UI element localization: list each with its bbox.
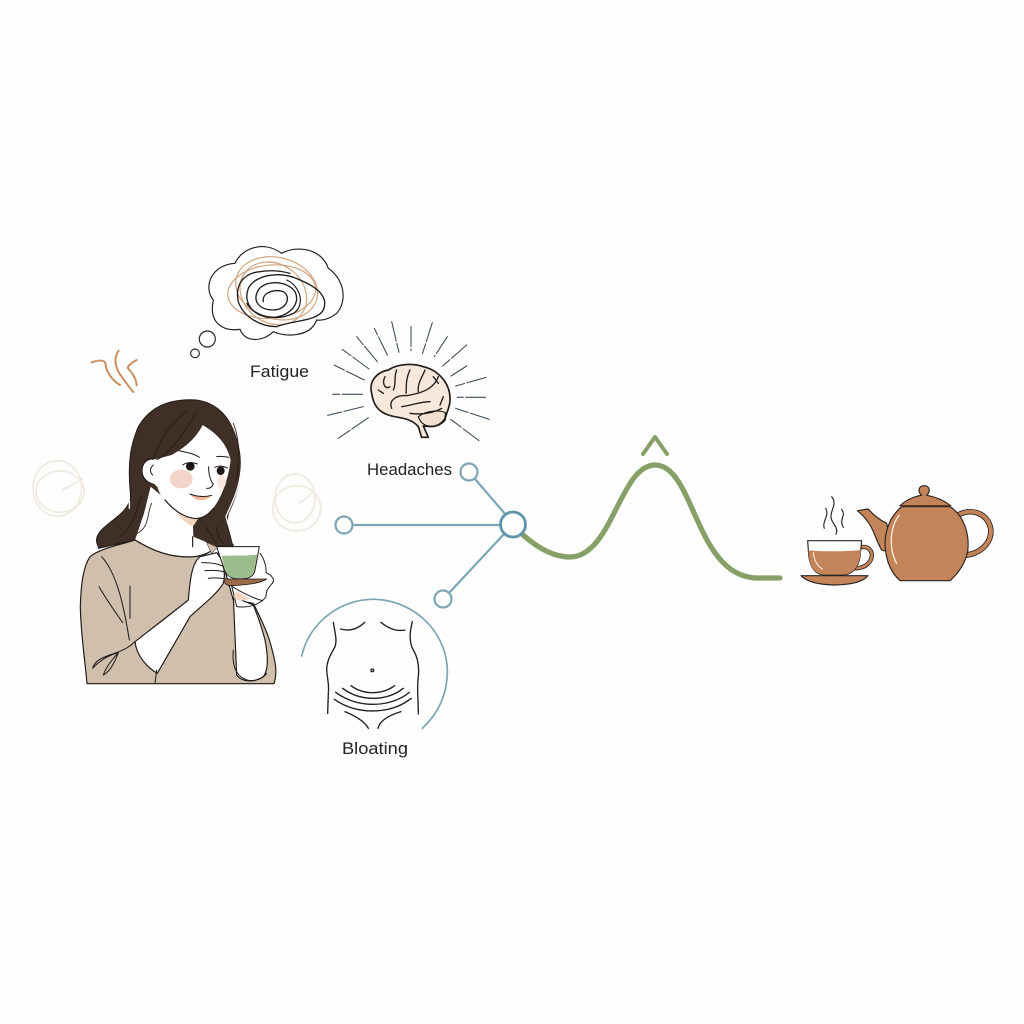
icon: thought bubble with scribble <box>191 247 343 358</box>
neck shadow <box>177 513 198 526</box>
icon: left faint swirl <box>33 461 84 516</box>
cup <box>217 547 259 579</box>
icon: stress marks above head <box>92 351 137 392</box>
hand details <box>202 553 273 607</box>
label: Fatigue: Fatigue <box>250 362 309 381</box>
steam <box>824 497 843 534</box>
saucer <box>224 579 267 586</box>
brain body <box>371 364 450 437</box>
saucer <box>801 576 868 585</box>
icon: right faint swirl <box>273 474 321 531</box>
dark scribble <box>238 271 325 327</box>
neck <box>135 487 217 557</box>
tan scribble <box>226 248 325 337</box>
cerebellum <box>418 411 445 426</box>
eyes <box>186 462 195 471</box>
arc <box>302 599 447 728</box>
node: fatigue <box>336 516 352 534</box>
node: bloating <box>434 590 452 608</box>
left arm <box>135 553 224 673</box>
mouth <box>190 494 212 500</box>
node: headaches <box>460 464 478 480</box>
icon: brain with radiating lines <box>328 322 489 441</box>
cup <box>808 541 862 575</box>
pot handle <box>958 512 991 555</box>
radiating lines <box>328 322 489 441</box>
hair highlights <box>95 412 241 547</box>
spout <box>857 509 893 553</box>
sleeve folds <box>93 557 267 683</box>
brain folds <box>378 370 443 414</box>
torso outline <box>327 622 419 728</box>
body sweater <box>80 540 276 684</box>
cup handle <box>854 547 872 568</box>
hair <box>96 400 241 548</box>
icon: abdomen in arc <box>302 599 447 728</box>
highlight <box>891 515 899 563</box>
hub node <box>500 512 526 537</box>
label: Headaches: Headaches <box>367 460 452 479</box>
icon: woman drinking tea <box>80 400 276 684</box>
cloud outline <box>209 247 343 340</box>
pot body <box>885 507 968 581</box>
right arm <box>233 597 267 681</box>
label: Bloating: Bloating <box>342 739 408 758</box>
lid <box>900 486 951 506</box>
green wave line <box>523 465 780 578</box>
connector lines <box>353 479 506 593</box>
green peak chevron <box>643 437 667 454</box>
icon: teacup and teapot <box>801 486 991 585</box>
blush <box>170 470 193 488</box>
face <box>142 425 231 518</box>
network connector <box>336 464 506 608</box>
thought bubble dots <box>199 331 215 347</box>
